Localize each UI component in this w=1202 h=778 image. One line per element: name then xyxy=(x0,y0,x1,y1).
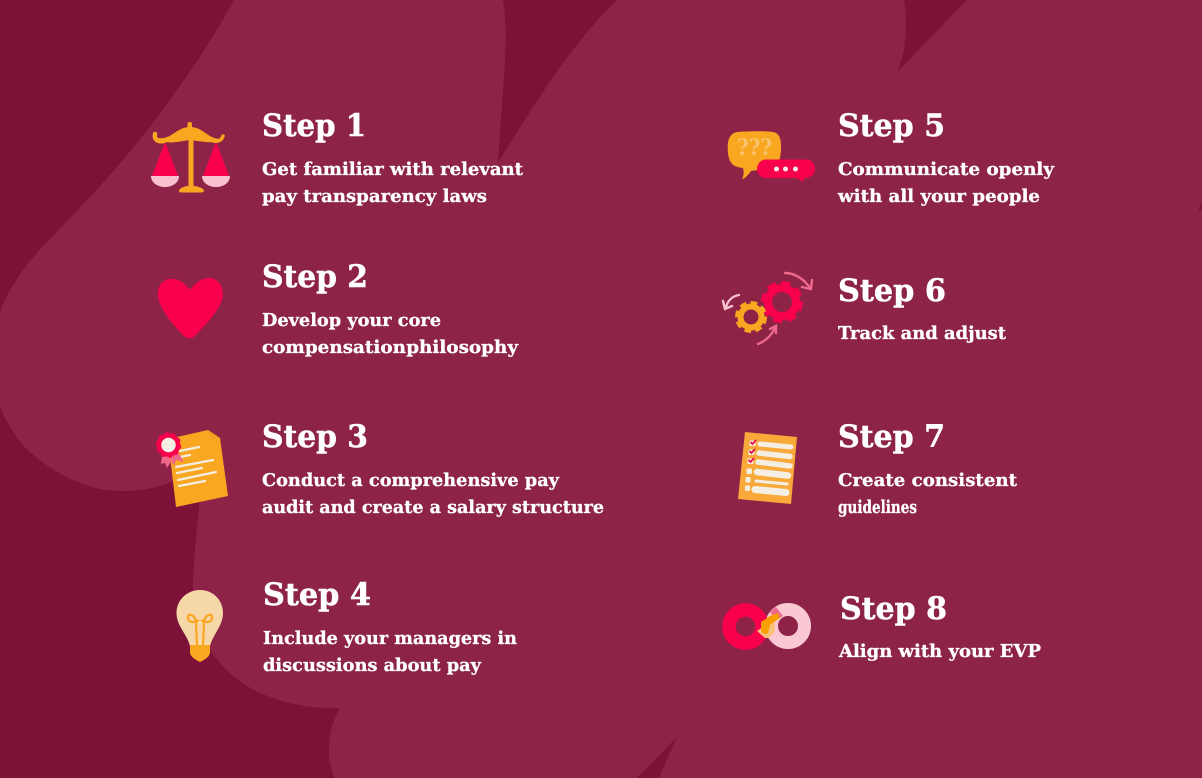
step 1 xyxy=(151,108,524,207)
description: step 1: Get familiar with relevant xyxy=(262,159,524,180)
description: step 3 xyxy=(262,470,604,518)
icon: light bulb xyxy=(176,590,223,662)
step 4 xyxy=(176,577,517,676)
step 7 xyxy=(738,419,1018,518)
heading: step 1: Step 1 xyxy=(262,108,366,144)
step 6 xyxy=(723,273,1007,344)
description: step 5: with all your people xyxy=(837,186,1040,207)
heading: step 5: Step 5 xyxy=(838,108,945,144)
step 5 xyxy=(728,108,1055,207)
description: step 8: Align with your EVP xyxy=(838,641,1041,662)
description: step 2: Develop your core xyxy=(262,310,441,331)
heading: step 4: Step 4 xyxy=(263,577,371,613)
heading: step 7: Step 7 xyxy=(838,419,945,455)
description: step 2: compensation philosophy xyxy=(262,337,519,358)
description: step 7: Create consistent xyxy=(838,470,1018,491)
description: step 3: Conduct a comprehensive pay xyxy=(262,470,560,491)
description: step 1: pay transparency laws xyxy=(262,186,487,207)
icon: heart xyxy=(158,278,223,338)
description: step 6: Track and adjust xyxy=(838,323,1007,344)
icon: checklist xyxy=(738,432,797,504)
icon: certificate xyxy=(156,430,228,507)
heading: step 6: Step 6 xyxy=(838,273,946,309)
description: step 5 xyxy=(837,159,1055,207)
description: step 4: Include your managers in xyxy=(263,628,517,649)
heading: step 3: Step 3 xyxy=(262,419,368,455)
description: step 7: guidelines xyxy=(838,497,917,518)
description: step 7 xyxy=(838,470,1018,518)
description: step 4: discussions about pay xyxy=(263,655,482,676)
icon: gears xyxy=(723,273,812,344)
icon: scales xyxy=(151,122,230,193)
description: step 3: audit and create a salary structure xyxy=(262,497,604,518)
description: step 4 xyxy=(263,628,517,676)
step 3 xyxy=(156,419,604,518)
description: step 1 xyxy=(262,159,524,207)
step 2 xyxy=(158,259,519,358)
icon: speech bubbles xyxy=(728,131,815,182)
description: step 5: Communicate openly xyxy=(838,159,1055,180)
heading: step 8: Step 8 xyxy=(840,591,947,627)
heading: step 2: Step 2 xyxy=(262,259,368,295)
description: step 2 xyxy=(262,310,519,358)
icon: speech bubbles: ??? xyxy=(737,135,772,161)
step 8 xyxy=(729,591,1041,662)
icon: infinity loop xyxy=(729,607,804,643)
